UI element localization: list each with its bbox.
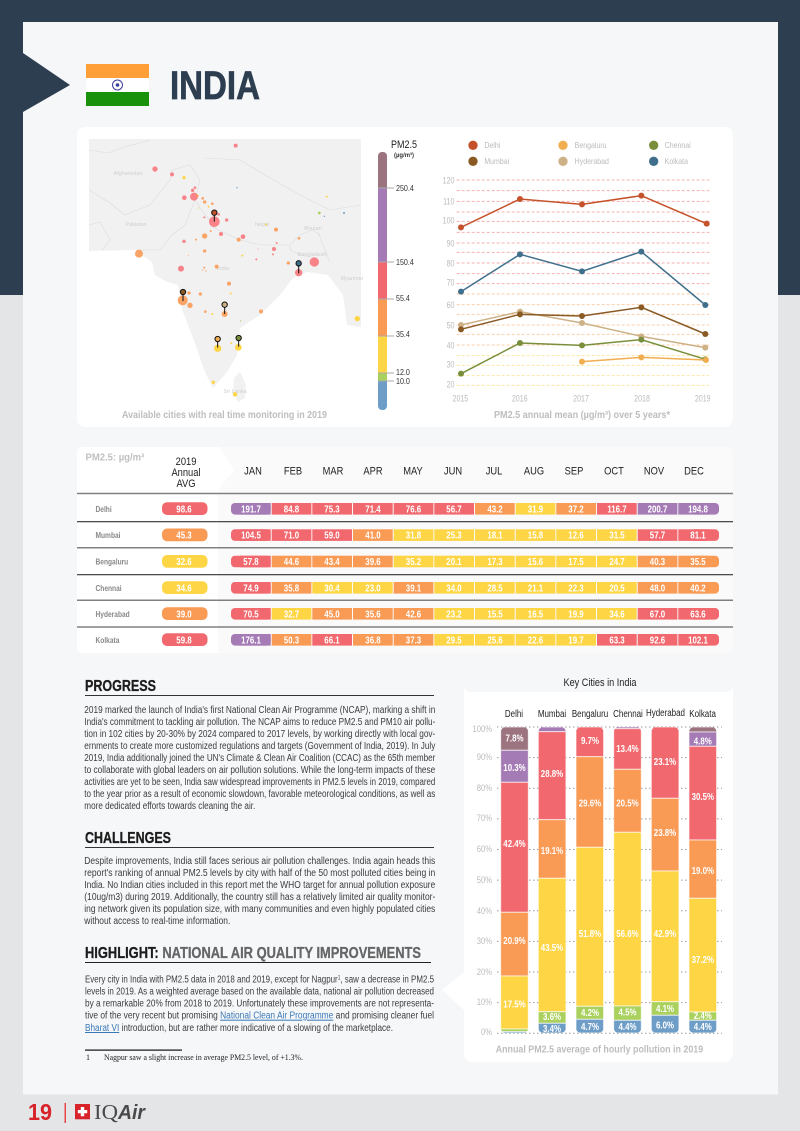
table header: DEC	[684, 466, 704, 478]
row: Kolkata: 59.8	[176, 634, 192, 646]
row: Chennai: 21.1	[528, 582, 543, 594]
map of India with city bubbles	[89, 139, 364, 405]
line: Delhi	[458, 193, 710, 230]
row: Mumbai: 12.6	[568, 530, 584, 541]
row: Hyderabad	[96, 607, 719, 620]
row: Bengaluru: 17.3	[487, 556, 503, 567]
section: challenges: without access to real-time information.	[83, 916, 230, 927]
row: Delhi: 76.6	[406, 503, 421, 515]
percent axis: 20%	[477, 966, 493, 977]
row: Kolkata: 29.5	[446, 634, 462, 646]
row: Chennai: 39.1	[406, 582, 421, 594]
row: Kolkata: 50.3	[284, 634, 299, 646]
city headers	[505, 707, 717, 719]
chart title: Key Cities in India	[564, 677, 637, 689]
section: progress: to collaborate with global leaders on air pollution solutions. While the long-term impacts of these	[84, 765, 436, 776]
line: Bengaluru	[579, 354, 709, 365]
bar: Delhi: 17.5%	[503, 999, 526, 1010]
row: Hyderabad: 23.2	[446, 608, 462, 620]
row: Bengaluru: 39.6	[365, 556, 381, 567]
city headers: Chennai	[613, 708, 643, 719]
row: Kolkata: 92.6	[650, 634, 665, 646]
row: Hyderabad: 15.5	[487, 608, 503, 620]
percent axis: 60%	[477, 843, 493, 854]
bar: Delhi: 7.8%	[506, 733, 523, 744]
row: Kolkata: 37.3	[406, 634, 421, 646]
PM2.5 colour legend: (µg/m³)	[394, 152, 414, 159]
row: Mumbai: 57.7	[650, 530, 665, 541]
table header	[86, 452, 704, 490]
row: Bengaluru: 32.6	[176, 556, 192, 567]
row: Bengaluru: 35.2	[406, 556, 421, 567]
section: challenges: ing network given its population size, with many communities and even highly populated cities	[84, 904, 435, 915]
row: Delhi: 56.7	[446, 503, 462, 515]
bar: Mumbai: 3.4%	[543, 1023, 561, 1034]
bar: Delhi	[501, 727, 528, 1033]
line chart: PM2.5 annual mean over 5 years: 2019	[695, 393, 711, 404]
section: highlight: Bharat VI introduction, but are rather more indicative of a slowing of the marketplace.	[85, 1023, 393, 1034]
footnote	[85, 1050, 303, 1062]
row: Bengaluru: 20.1	[446, 556, 462, 567]
bar: Hyderabad: 42.9%	[654, 928, 676, 939]
chart legend: Hyderabad	[575, 156, 609, 166]
row: Bengaluru	[96, 555, 719, 568]
footer: page number and logo: IQ	[94, 1100, 118, 1124]
section: challenges: CHALLENGES	[85, 830, 171, 847]
row: Chennai: 20.5	[609, 582, 625, 594]
percent axis: 100%	[473, 723, 493, 734]
panel: monthly table	[77, 447, 733, 653]
line chart: PM2.5 annual mean over 5 years: 2016	[512, 393, 528, 404]
line chart: PM2.5 annual mean over 5 years: 60	[447, 300, 455, 310]
bar: Chennai	[614, 727, 641, 1033]
section: progress: India's commitment to tackling air pollution. The NCAP aims to reduce PM2.5 and PM10 air pollu-	[84, 717, 435, 728]
row: Hyderabad: 32.7	[284, 608, 299, 620]
bar: Hyderabad: 23.1%	[654, 756, 676, 767]
section: highlight	[85, 945, 434, 1034]
row: Hyderabad: 35.6	[365, 608, 381, 620]
row: Mumbai: Mumbai	[95, 530, 121, 540]
row: Mumbai: 104.5	[241, 530, 261, 541]
section: challenges: India. No Indian cities included in this report met the WHO target for annual pollution exposure	[84, 880, 436, 891]
bar: Mumbai: 28.8%	[541, 768, 563, 779]
row: Delhi: 37.2	[568, 503, 584, 515]
row: Hyderabad: 42.6	[406, 608, 421, 620]
row: Chennai: Chennai	[95, 583, 122, 593]
row: Delhi	[96, 502, 719, 515]
footer: page number and logo	[28, 1099, 146, 1125]
section: challenges: (10ug/m3) during 2019. Additionally, the country still has a relatively limited air quality monitor-	[84, 892, 435, 903]
section: highlight: Every city in India with PM2.5 data in 2018 and 2019, except for Nagpur	[85, 974, 403, 986]
row: Chennai: 30.4	[324, 582, 340, 594]
row: Kolkata: 36.8	[365, 634, 381, 646]
city headers: Delhi	[505, 708, 523, 719]
section: progress: ernments to create more customized regulations and targets (Government of India, 2019). In July	[84, 741, 435, 752]
line: Mumbai	[458, 304, 708, 337]
percent axis: 50%	[477, 874, 493, 885]
map caption: Available cities with real time monitoring in 2019	[122, 409, 327, 421]
bar: Hyderabad: 6.0%	[656, 1020, 674, 1031]
row: Kolkata: 102.1	[688, 634, 708, 646]
row: Delhi: 43.2	[487, 503, 503, 515]
row: Kolkata: 22.6	[528, 634, 543, 646]
panel: key cities stacked bar chart	[442, 671, 733, 1062]
map of India with city bubbles: Sri Lanka	[223, 389, 248, 395]
footnote: Nagpur saw a slight increase in average PM2.5 level, of +1.3%.	[104, 1053, 303, 1062]
section: highlight: , saw a decrease in PM2.5	[340, 974, 434, 986]
bar: Mumbai: 19.1%	[541, 845, 563, 856]
bar: Chennai: 13.4%	[616, 743, 639, 754]
row: Chennai: 22.3	[568, 582, 584, 594]
bar: Hyderabad	[651, 727, 679, 1033]
line chart: PM2.5 annual mean over 5 years: 40	[447, 340, 455, 351]
row: Hyderabad: 67.0	[650, 608, 665, 620]
row: Kolkata: Kolkata	[95, 635, 120, 645]
line chart: PM2.5 annual mean over 5 years: 2017	[573, 393, 589, 404]
row: Bengaluru: 17.5	[568, 556, 584, 567]
PM2.5 colour legend: 10.0	[396, 376, 410, 386]
row: Hyderabad: 63.6	[690, 608, 706, 620]
map of India with city bubbles: India	[217, 266, 230, 272]
row: Mumbai: 41.0	[365, 530, 381, 541]
bar: Bengaluru: 4.7%	[581, 1021, 599, 1032]
row: Mumbai	[96, 528, 719, 541]
percent axis: 30%	[477, 935, 493, 946]
table header: JUL	[486, 466, 503, 478]
chart legend: Delhi	[484, 140, 501, 150]
row: Mumbai: 15.8	[528, 530, 543, 541]
table header: MAR	[323, 466, 343, 478]
row: Bengaluru: 57.8	[243, 556, 259, 567]
line chart: PM2.5 annual mean over 5 years: 30	[447, 360, 455, 370]
row: Bengaluru: 44.6	[284, 556, 299, 567]
bar: Kolkata: 37.2%	[692, 954, 714, 965]
PM2.5 colour legend: 150.4	[396, 257, 414, 267]
bar: Delhi: 20.9%	[503, 935, 526, 946]
bar: Chennai: 56.6%	[616, 928, 639, 939]
table header: NOV	[644, 466, 664, 478]
icon: flag of India	[86, 64, 149, 106]
percent axis: 80%	[477, 782, 493, 793]
line chart: PM2.5 annual mean over 5 years: 120	[443, 175, 455, 186]
section: highlight: by a remarkable 20% from 2018 to 2019. Unfortunately these improvements are not representa-	[85, 999, 434, 1010]
chart legend: Bengaluru	[575, 140, 607, 150]
row: Bengaluru: 40.3	[650, 556, 665, 567]
section: progress: PROGRESS	[85, 678, 156, 695]
section: highlight: levels in 2019. As a weighted average based on the available data, national air pollution decreased	[85, 986, 434, 998]
row: Delhi: 200.7	[648, 503, 667, 515]
bar: Kolkata: 4.8%	[694, 736, 712, 747]
row: Delhi: 191.7	[241, 503, 261, 515]
row: Delhi: Delhi	[95, 504, 112, 514]
row: Chennai: 35.8	[284, 582, 299, 594]
row: Chennai: 40.2	[690, 582, 706, 594]
line chart: PM2.5 annual mean over 5 years	[443, 140, 711, 404]
bar: Bengaluru: 9.7%	[581, 735, 599, 746]
bar: Bengaluru	[576, 727, 604, 1033]
row: Mumbai: 31.5	[609, 530, 625, 541]
PM2.5 colour legend: 35.4	[396, 329, 410, 339]
bar: Hyderabad: 4.1%	[656, 1003, 674, 1014]
row: Hyderabad: 34.6	[609, 608, 625, 620]
map of India with city bubbles: Pakistan	[125, 222, 147, 228]
row: Bengaluru: 43.4	[324, 556, 340, 567]
section: challenges: Despite improvements, India still faces serious air pollution challenges. India again heads this	[84, 856, 435, 867]
bar: Chennai: 20.5%	[616, 798, 639, 809]
line chart: PM2.5 annual mean over 5 years: 50	[447, 320, 455, 331]
percent axis: 40%	[477, 905, 493, 916]
row: Hyderabad: 45.0	[324, 608, 340, 620]
bar: Mumbai: 43.5%	[541, 942, 563, 953]
PM2.5 colour legend: 55.4	[396, 293, 410, 303]
line chart: PM2.5 annual mean over 5 years: 20	[447, 380, 455, 390]
row: Chennai: 23.0	[365, 582, 381, 594]
percent axis: 90%	[477, 751, 493, 762]
footer: page number and logo: Air	[117, 1102, 146, 1124]
bar: Delhi: 10.3%	[503, 762, 526, 773]
row: Mumbai: 59.0	[324, 530, 340, 541]
icon: Swiss cross	[75, 1104, 90, 1119]
chart legend	[468, 140, 691, 166]
bar: Bengaluru: 29.6%	[579, 798, 601, 809]
row: Delhi: 194.8	[688, 503, 708, 515]
bar: Kolkata	[689, 727, 717, 1033]
bar: Chennai: 4.5%	[619, 1007, 636, 1018]
line chart caption: PM2.5 annual mean (µg/m³) over 5 years*	[494, 409, 671, 421]
row: Bengaluru: 15.6	[528, 556, 543, 567]
footnote: 1	[86, 1053, 90, 1062]
map of India with city bubbles: Bhutan	[304, 226, 322, 232]
row: Mumbai: 31.8	[406, 530, 421, 541]
map of India with city bubbles: Myanmar	[341, 276, 364, 282]
table header: MAY	[403, 466, 423, 478]
row: Chennai: 34.6	[176, 582, 192, 594]
bar: Bengaluru: 4.2%	[581, 1007, 599, 1018]
table header: Annual	[171, 467, 201, 479]
bar: Kolkata: 30.5%	[692, 791, 714, 802]
line: Hyderabad	[458, 309, 708, 351]
section: progress: tion in 102 cities by 20-30% by 2024 compared to 2017 levels, by working directly with local gov-	[84, 729, 435, 740]
row: Kolkata: 25.6	[487, 634, 503, 646]
line chart: PM2.5 annual mean over 5 years: 110	[443, 197, 455, 207]
row: Delhi: 75.3	[324, 503, 340, 515]
city headers: Bengaluru	[572, 708, 608, 719]
section: highlight: 1	[338, 976, 341, 982]
row: Mumbai: 18.1	[487, 530, 503, 541]
row: Delhi: 84.8	[284, 503, 299, 515]
section: progress: to the year prior as a result of economic slowdown, favorable meteorological conditions, as well as	[84, 789, 435, 800]
section: progress: 2019 marked the launch of India's first National Clean Air Programme (NCAP), marking a shift in	[84, 705, 435, 716]
city headers: Kolkata	[689, 708, 717, 719]
row: Hyderabad: 39.0	[176, 608, 192, 620]
table header: 2019	[176, 456, 197, 468]
PM2.5 colour legend	[378, 139, 417, 410]
line chart: PM2.5 annual mean over 5 years: 2015	[453, 393, 469, 404]
bar: Kolkata: 19.0%	[692, 865, 714, 876]
percent axis	[473, 723, 493, 1037]
line chart: PM2.5 annual mean over 5 years: 90	[447, 238, 455, 249]
footer: page number and logo: 19	[28, 1099, 52, 1125]
table header: AUG	[524, 466, 544, 478]
row: Delhi: 98.6	[176, 503, 192, 515]
section: progress	[84, 678, 436, 812]
table header: SEP	[565, 466, 584, 478]
row: Hyderabad: 19.9	[568, 608, 584, 620]
percent axis: 70%	[477, 812, 493, 823]
bar: Hyderabad: 23.8%	[654, 827, 676, 838]
bar: Delhi: 42.4%	[503, 838, 526, 849]
percent axis: 0%	[481, 1026, 493, 1037]
table header: OCT	[604, 466, 624, 478]
panel: map and trend card	[77, 127, 733, 427]
bar: Chennai: 4.4%	[619, 1021, 636, 1032]
section: progress: activities are yet to be seen, India saw widespread improvements in PM2.5 levels in 2019, compared	[84, 777, 435, 788]
row: Hyderabad: 70.5	[243, 608, 259, 620]
section: highlight: tive of the very recent but promising National Clean Air Programme and promising cleaner fuel	[85, 1011, 434, 1022]
line chart: PM2.5 annual mean over 5 years: 100	[443, 215, 455, 226]
section: progress: more dedicated efforts towards cleaning the air.	[84, 801, 255, 812]
row: Delhi: 71.4	[365, 503, 381, 515]
map pins	[180, 210, 301, 348]
row: Hyderabad: Hyderabad	[95, 609, 130, 619]
map of India with city bubbles: Nepal	[255, 222, 269, 228]
row: Bengaluru: 35.5	[690, 556, 706, 567]
chart legend: Chennai	[665, 140, 691, 150]
PM2.5 colour legend: PM2.5	[391, 139, 417, 151]
row: Mumbai: 71.0	[284, 530, 299, 541]
line: Kolkata	[458, 249, 708, 308]
bar: Kolkata: 2.4%	[694, 1010, 712, 1021]
row: Bengaluru: Bengaluru	[95, 557, 129, 567]
chart legend: Mumbai	[484, 156, 509, 166]
row: Bengaluru: 24.7	[609, 556, 625, 567]
row: Chennai: 28.5	[487, 582, 503, 594]
table header: APR	[363, 466, 383, 478]
table header: AVG	[176, 478, 196, 490]
section: challenges: report's ranking of annual PM2.5 levels by city with half of the 50 most polluted cities being in	[84, 868, 435, 879]
table header: JUN	[444, 466, 462, 478]
row: Hyderabad: 16.5	[528, 608, 543, 620]
row: Kolkata: 176.1	[241, 634, 261, 646]
row: Kolkata: 19.7	[568, 634, 584, 646]
row: Kolkata: 66.1	[324, 634, 340, 646]
city headers: Hyderabad	[646, 707, 685, 718]
row: Chennai	[96, 581, 719, 594]
bar: Mumbai	[538, 727, 566, 1034]
line: Chennai	[458, 337, 708, 377]
bar: Bengaluru: 51.8%	[579, 928, 601, 939]
line chart: PM2.5 annual mean over 5 years: 2018	[634, 393, 650, 404]
row: Delhi: 116.7	[607, 503, 627, 515]
city headers: Mumbai	[538, 708, 566, 719]
line chart: PM2.5 annual mean over 5 years: 70	[447, 278, 455, 288]
row: Mumbai: 81.1	[690, 530, 706, 541]
map of India with city bubbles: Bangladesh	[297, 252, 327, 258]
table header: FEB	[284, 466, 302, 478]
title: INDIA	[170, 64, 260, 108]
PM2.5 colour legend: 250.4	[396, 183, 414, 193]
table header: JAN	[244, 466, 262, 478]
section: challenges	[83, 830, 436, 927]
section: highlight: HIGHLIGHT: NATIONAL AIR QUALITY IMPROVEMENTS	[85, 945, 421, 962]
bar: Mumbai: 3.6%	[543, 1011, 561, 1022]
map of India with city bubbles: Afghanistan	[113, 171, 143, 177]
row: Chennai: 74.9	[243, 582, 259, 594]
row: Kolkata	[96, 633, 719, 646]
row: Delhi: 31.9	[528, 503, 543, 515]
PM2.5 colour legend: 12.0	[396, 367, 410, 377]
percent axis: 10%	[477, 996, 493, 1007]
line chart: PM2.5 annual mean over 5 years: 80	[447, 258, 455, 269]
chart caption: Annual PM2.5 average of hourly pollution in 2019	[496, 1044, 703, 1056]
row: Mumbai: 25.3	[446, 530, 462, 541]
row: Mumbai: 45.3	[176, 530, 192, 541]
bar: Kolkata: 4.4%	[694, 1021, 712, 1032]
row: Chennai: 48.0	[650, 582, 665, 594]
section: progress: 2019, India additionally joined the UN's Climate & Clean Air Coalition (CCAC) as the 65th member	[84, 753, 436, 764]
chart legend: Kolkata	[665, 156, 689, 166]
table header: PM2.5: µg/m³	[86, 452, 145, 464]
row: Kolkata: 63.3	[609, 634, 625, 646]
row: Chennai: 34.0	[446, 582, 462, 594]
